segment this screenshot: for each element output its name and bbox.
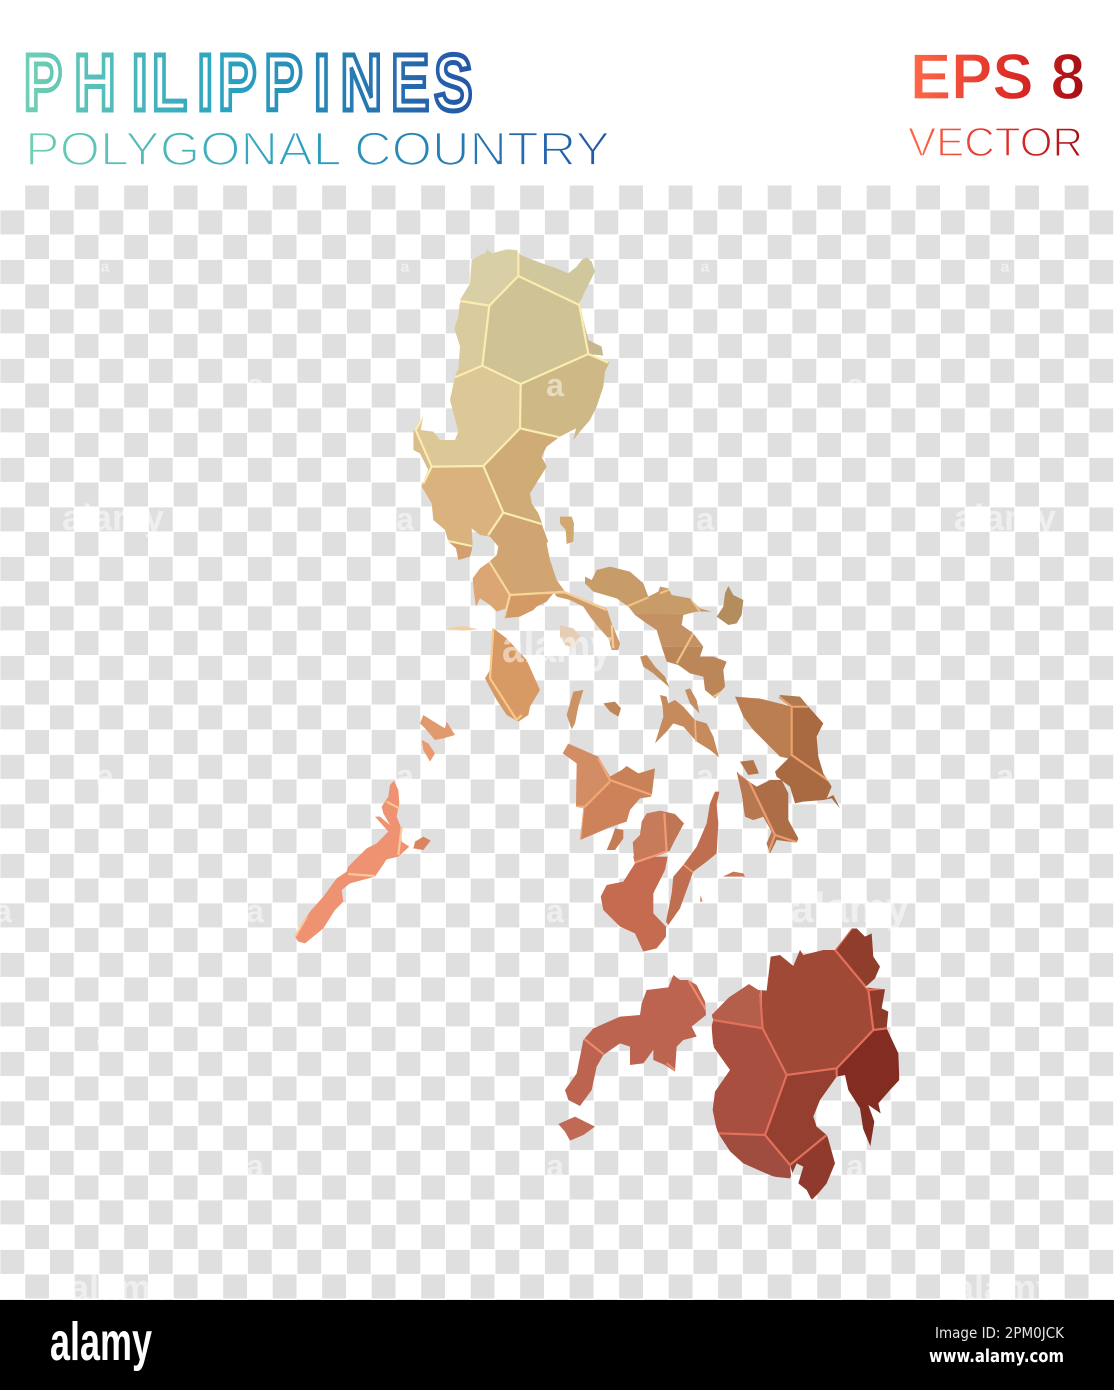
faint stock watermarks: a <box>396 758 414 794</box>
sliver islet <box>447 626 478 631</box>
faint stock watermarks: a <box>696 501 714 537</box>
faint stock watermarks: a <box>1001 259 1010 276</box>
faint stock watermarks: a <box>96 758 114 794</box>
Leyte <box>736 772 798 854</box>
faint stock watermarks: a <box>401 259 410 276</box>
label: EPS 8: EPS 8 <box>910 40 1085 113</box>
label: vector: VECTOR <box>908 119 1083 165</box>
title: Philippines: PHILIPPINES <box>24 38 473 127</box>
faint stock watermarks: a <box>996 758 1014 794</box>
Cebu <box>666 792 719 925</box>
faint stock watermarks: alamy <box>954 1267 1056 1308</box>
Basilan <box>558 1117 595 1141</box>
Bicol strip <box>553 592 620 650</box>
faint stock watermarks: a <box>996 1018 1014 1054</box>
faint stock watermarks: a <box>546 1148 564 1184</box>
faint stock watermarks: a <box>246 367 264 403</box>
Palawan <box>295 781 409 943</box>
Marinduque <box>560 625 581 648</box>
faint stock watermarks <box>0 259 1056 1308</box>
faint stock watermarks: a <box>101 259 110 276</box>
region: Mindanao <box>558 923 903 1203</box>
Tablas and Sibuyan <box>567 690 583 729</box>
Guimaras <box>607 828 623 850</box>
Samar <box>735 695 840 808</box>
Cuyo <box>413 837 431 850</box>
faint stock watermarks: alamy <box>502 620 612 672</box>
faint stock watermarks: a <box>696 1018 714 1054</box>
Masbate strip <box>640 655 669 687</box>
footer bar <box>0 1300 1114 1390</box>
Catanduanes <box>717 586 743 625</box>
faint stock watermarks: a <box>396 501 414 537</box>
faint stock watermarks: a <box>846 367 864 403</box>
faint stock watermarks: alamy <box>69 1267 171 1308</box>
subtitle: polygonal country: POLYGONAL COUNTRY <box>25 122 610 175</box>
faint stock watermarks: a <box>246 893 264 929</box>
Culion <box>422 740 435 762</box>
Siquijor sliver <box>700 895 703 902</box>
Biliran <box>740 760 759 775</box>
Bicol north <box>585 566 726 698</box>
faint stock watermarks: a <box>846 1148 864 1184</box>
faint stock watermarks: a <box>246 1148 264 1184</box>
Panay <box>562 744 655 840</box>
footer image id: Image ID: 2PM0JCK <box>935 1324 1065 1342</box>
footer logo: alamy: alamy <box>50 1312 152 1372</box>
faint stock watermarks: a <box>701 259 710 276</box>
faint stock watermarks: alamy <box>62 497 164 538</box>
faint stock watermarks: a <box>96 1018 114 1054</box>
faint stock watermarks: alamy <box>790 884 910 931</box>
region: Luzon <box>407 240 613 623</box>
footer website: www.alamy.com <box>929 1346 1064 1367</box>
Zamboanga peninsula <box>565 975 706 1106</box>
faint stock watermarks: a <box>546 893 564 929</box>
Masbate <box>655 695 719 757</box>
faint stock watermarks: a <box>696 758 714 794</box>
Busuanga <box>420 715 455 740</box>
island: Polillo <box>560 517 574 544</box>
region: Visayas and Bicol <box>540 560 843 957</box>
Negros <box>600 810 684 952</box>
faint stock watermarks: alamy <box>954 497 1056 538</box>
Bohol sliver <box>723 872 745 877</box>
faint stock watermarks: a <box>396 1018 414 1054</box>
main island <box>707 923 903 1203</box>
map: Philippines polygonal islands <box>295 240 903 1203</box>
faint stock watermarks: a <box>546 367 564 403</box>
region: Mindoro and Palawan <box>295 626 540 943</box>
